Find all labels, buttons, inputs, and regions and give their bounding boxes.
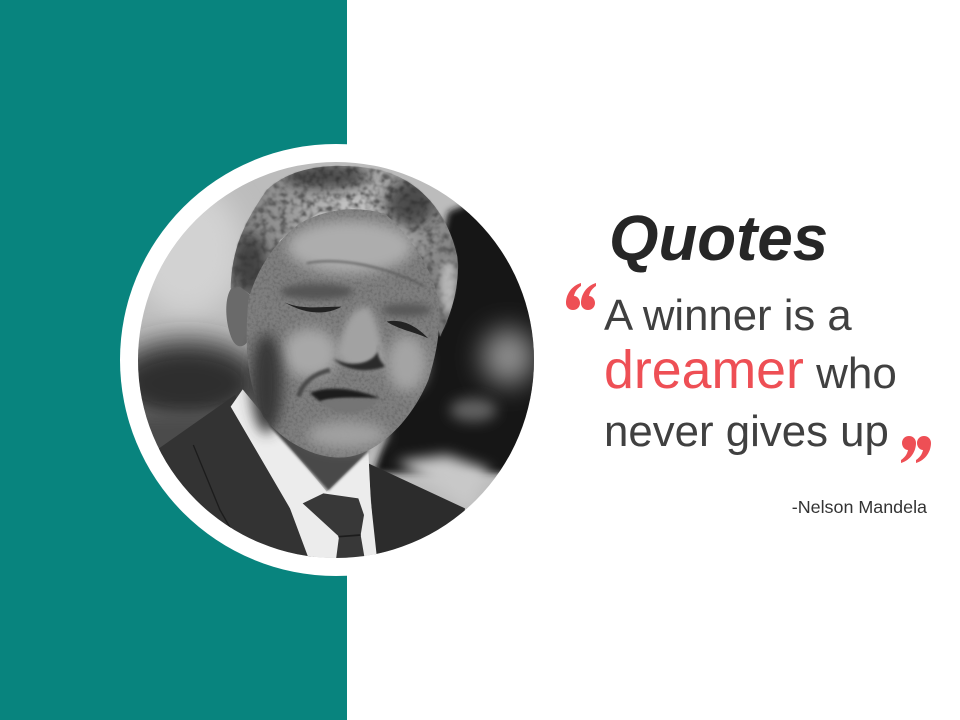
line 3: never gives up	[604, 407, 889, 456]
attribution: -Nelson Mandela	[792, 497, 927, 517]
left eye	[280, 284, 353, 300]
line 2 with highlighted word: dreamer who	[604, 340, 897, 400]
mouth	[310, 389, 380, 402]
line 1: A winner is a	[604, 291, 852, 340]
quote text	[604, 291, 897, 456]
nose shadow	[333, 345, 385, 370]
face	[247, 209, 439, 458]
right eye	[382, 303, 432, 317]
blurred background	[138, 162, 534, 558]
icon: opening quote mark	[566, 283, 596, 310]
necktie	[302, 493, 364, 558]
ear	[226, 283, 252, 346]
title: Quotes	[609, 203, 828, 274]
portrait photo: man in suit, black and white	[138, 162, 534, 558]
hair	[231, 164, 458, 337]
icon: closing quote mark	[901, 436, 931, 463]
white ring behind portrait	[120, 144, 552, 576]
neck	[247, 367, 370, 491]
white shirt collar	[230, 390, 376, 558]
suit jacket	[159, 396, 465, 557]
teal side panel	[0, 0, 347, 720]
